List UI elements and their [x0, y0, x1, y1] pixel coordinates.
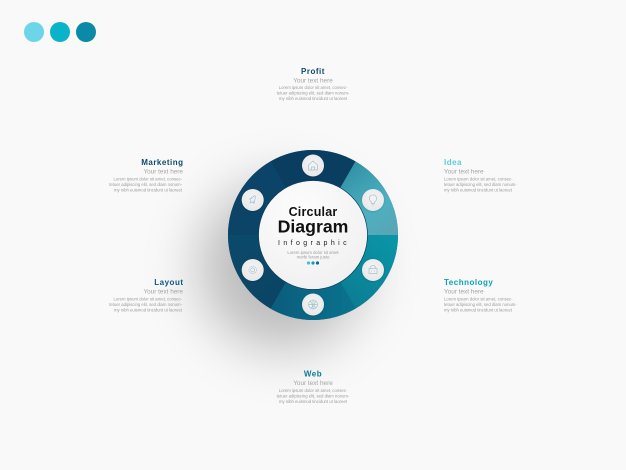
text block: idea: Lorem ipsum dolor sit amet, consec- [444, 176, 513, 182]
text block: layout: Layout [154, 278, 184, 287]
text block: layout: Your text here [143, 288, 183, 296]
text block: technology: tetuer adipiscing elit, sed diam nonum- [444, 302, 517, 307]
centre title: Circular [289, 205, 337, 219]
text block: idea: tetuer adipiscing elit, sed diam nonum- [444, 182, 517, 187]
circular diagram [228, 150, 398, 320]
text block: web: my nibh euismod tincidunt ut laoreet [279, 399, 348, 404]
segment: idea [340, 161, 398, 235]
segment: marketing [228, 161, 286, 235]
text block: marketing: my nibh euismod tincidunt ut laoreet [114, 188, 183, 192]
text block: layout: my nibh euismod tincidunt ut laoreet [114, 308, 183, 312]
text block: web: Lorem ipsum dolor sit amet, consec- [279, 388, 348, 393]
icon: light bulb [362, 189, 384, 211]
text block: profit: Lorem ipsum dolor sit amet, consec- [279, 85, 348, 90]
icon: rocket [242, 189, 264, 211]
centre title [278, 205, 350, 260]
text block: profit: tetuer adipiscing elit, sed diam nonum- [277, 90, 350, 96]
text block: technology: Technology [444, 278, 493, 287]
centre disc [258, 180, 368, 290]
text block: marketing: Lorem ipsum dolor sit amet, consec- [114, 176, 183, 182]
text block: technology [444, 278, 517, 312]
icon: globe [302, 294, 324, 316]
text block: idea: my nibh euismod tincidunt ut laoreet [444, 188, 513, 192]
text block: profit: Profit [301, 67, 325, 76]
segment: profit [270, 150, 356, 188]
centre title: Lorem ipsum dolor sit amet [287, 250, 339, 255]
text block: profit: my nibh euismod tincidunt ut laoreet [279, 96, 348, 101]
text block: web: Your text here [293, 380, 333, 387]
text block: web: Web [304, 370, 322, 378]
text block: idea: Idea [444, 158, 462, 167]
text block: layout: tetuer adipiscing elit, sed diam nonum- [109, 302, 183, 307]
text block: profit [277, 67, 350, 101]
drop shadow of the ring [198, 182, 366, 350]
text block: marketing [109, 158, 184, 192]
text block: marketing: Your text here [143, 168, 183, 176]
icon: home [302, 154, 324, 176]
base disc [228, 150, 398, 320]
text block: technology: Your text here [444, 288, 484, 296]
text block: web [277, 370, 350, 404]
text block: layout: Lorem ipsum dolor sit amet, consec- [114, 296, 183, 302]
icon: robot [362, 259, 384, 281]
text block: idea: Your text here [444, 168, 484, 176]
segment: technology [340, 235, 398, 309]
text block: profit: Your text here [293, 78, 333, 84]
centre title: Diagram [278, 216, 348, 236]
text block: web: tetuer adipiscing elit, sed diam nonum- [277, 394, 350, 398]
segment: layout [228, 235, 286, 309]
centre title: morbi feram justo [297, 254, 330, 260]
dots: colour palette [24, 22, 96, 42]
text block: marketing: Marketing [141, 158, 184, 167]
icon: gear [242, 259, 264, 281]
text block: technology: my nibh euismod tincidunt ut laoreet [444, 308, 513, 312]
text block: technology: Lorem ipsum dolor sit amet, consec- [444, 296, 513, 302]
text block: layout [109, 278, 184, 312]
centre title: Infographic [278, 240, 350, 247]
text block: idea [444, 158, 517, 192]
segment: web [270, 282, 356, 320]
centre dots [307, 261, 319, 265]
text block: marketing: tetuer adipiscing elit, sed diam nonum- [109, 182, 183, 187]
